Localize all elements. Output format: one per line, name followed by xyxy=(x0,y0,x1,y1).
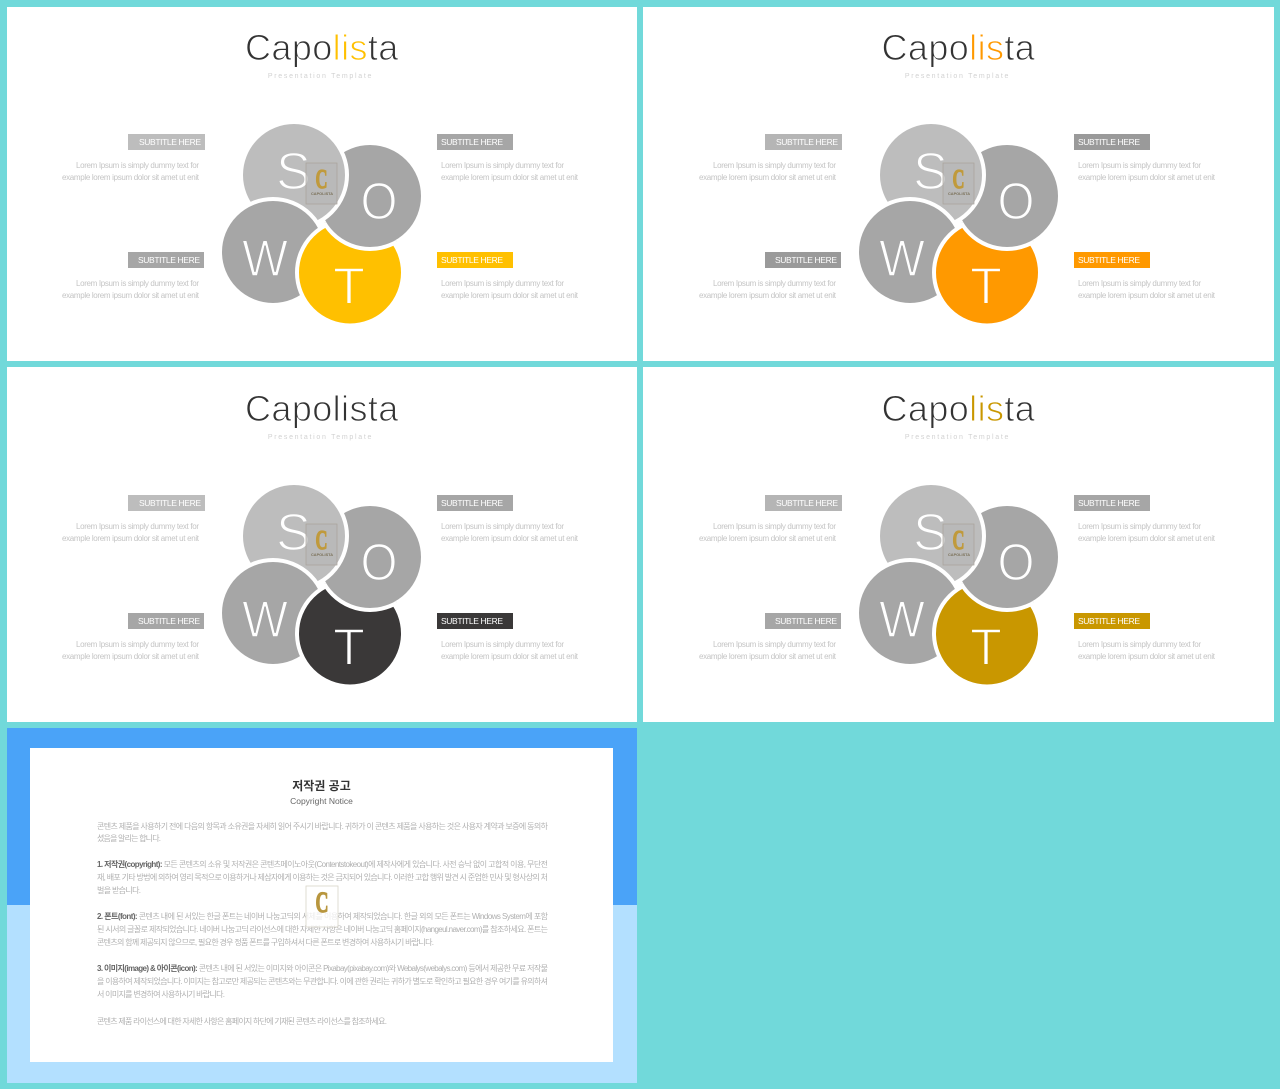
panel: SWOT slide gold xyxy=(643,367,1274,722)
circle S xyxy=(878,122,984,228)
text block: W: example lorem ipsum dolor sit amet ut enit xyxy=(62,291,200,300)
text block: T: Lorem Ipsum is simply dummy text for xyxy=(441,640,564,649)
text block: O xyxy=(437,134,579,182)
heading: copyright: 저작권 공고 xyxy=(292,778,351,793)
text block: O: SUBTITLE HERE xyxy=(1078,137,1140,147)
text block: S xyxy=(699,134,842,182)
text block: T: example lorem ipsum dolor sit amet ut enit xyxy=(441,291,579,300)
circle T xyxy=(297,580,403,686)
panel: copyright notice xyxy=(7,728,637,1083)
panel: SWOT slide dark xyxy=(7,367,637,722)
text block: O: SUBTITLE HERE xyxy=(441,137,503,147)
text block: S: SUBTITLE HERE xyxy=(139,498,201,508)
text block: S: Lorem Ipsum is simply dummy text for xyxy=(713,161,836,170)
text block: S: SUBTITLE HERE xyxy=(776,498,838,508)
logo: CAPOLISTA xyxy=(948,191,970,196)
logo xyxy=(306,524,337,565)
circle S xyxy=(878,483,984,589)
text block: T: example lorem ipsum dolor sit amet ut enit xyxy=(1078,652,1216,661)
text block: T: example lorem ipsum dolor sit amet ut enit xyxy=(1078,291,1216,300)
text block: W: Lorem Ipsum is simply dummy text for xyxy=(76,640,199,649)
text block: W: example lorem ipsum dolor sit amet ut enit xyxy=(699,652,837,661)
circle S: S xyxy=(276,143,311,201)
circle W: W xyxy=(242,591,288,649)
text block: T: Lorem Ipsum is simply dummy text for xyxy=(441,279,564,288)
circle T xyxy=(297,220,403,326)
circle O: O xyxy=(998,534,1034,592)
logo: CAPOLISTA xyxy=(311,552,333,557)
text block: O: example lorem ipsum dolor sit amet ut enit xyxy=(441,534,579,543)
circle O xyxy=(954,143,1060,249)
logo: C xyxy=(316,525,328,555)
text block: W: Lorem Ipsum is simply dummy text for xyxy=(713,279,836,288)
paragraph 2: font xyxy=(97,911,549,947)
text block: T xyxy=(437,252,579,300)
paragraph 3: image and icon xyxy=(97,963,548,999)
circle S: S xyxy=(913,504,948,562)
text block: S xyxy=(62,495,205,543)
logo: C xyxy=(316,164,328,194)
text block: W xyxy=(699,613,841,661)
paragraph 1: copyright: 재, 배포 기타 방법에 의하여 영리 목적으로 이용하거나 제삼자에게 이용하는 것은 금지되어 있습니다. 이러한 고합 행위 발견 시 준엄한 민사 및 형사상의 처 xyxy=(97,872,548,882)
title: Capolista xyxy=(245,388,399,429)
panel: SWOT slide orange xyxy=(643,7,1274,361)
paragraph 1: copyright: 1. 저작권(copyright): 모든 콘텐츠의 소유 및 저작권은 콘텐츠메이노아웃(Contentstokeout)에 제작사에게 있습니다. 사전 승낙 없이 고합적 이용, 무단전 xyxy=(97,859,548,869)
subtitle: Presentation Template xyxy=(905,73,1010,80)
text block: T: Lorem Ipsum is simply dummy text for xyxy=(1078,640,1201,649)
text block: O xyxy=(1074,495,1216,543)
text block: W: SUBTITLE HERE xyxy=(775,616,837,626)
circle T: T xyxy=(970,258,1002,316)
text block: O xyxy=(437,495,579,543)
logo: C xyxy=(316,886,328,919)
circle S xyxy=(241,483,347,589)
circle O xyxy=(317,504,423,610)
circle O: O xyxy=(360,534,398,592)
SWOT diagram xyxy=(857,122,1060,326)
text block: S: example lorem ipsum dolor sit amet ut enit xyxy=(62,534,200,543)
circle W xyxy=(857,560,963,666)
circle O: O xyxy=(998,173,1034,231)
circle T xyxy=(934,220,1040,326)
circle T: T xyxy=(333,619,365,677)
text block: O: example lorem ipsum dolor sit amet ut enit xyxy=(441,173,579,182)
text block: W xyxy=(699,252,841,300)
circle T: T xyxy=(333,258,365,316)
text block: W: example lorem ipsum dolor sit amet ut enit xyxy=(699,291,837,300)
text block: S: Lorem Ipsum is simply dummy text for xyxy=(713,522,836,531)
text block: T: Lorem Ipsum is simply dummy text for xyxy=(1078,279,1201,288)
circle S: S xyxy=(276,504,311,562)
text block: T: SUBTITLE HERE xyxy=(441,616,503,626)
text block: O: example lorem ipsum dolor sit amet ut enit xyxy=(1078,173,1216,182)
text block: S xyxy=(699,495,842,543)
text block: W xyxy=(62,252,204,300)
text block: S: Lorem Ipsum is simply dummy text for xyxy=(76,161,199,170)
SWOT diagram xyxy=(220,122,423,326)
text block: O: Lorem Ipsum is simply dummy text for xyxy=(1078,161,1201,170)
text block: W: example lorem ipsum dolor sit amet ut enit xyxy=(62,652,200,661)
text block: S: Lorem Ipsum is simply dummy text for xyxy=(76,522,199,531)
circle O xyxy=(954,504,1060,610)
text block: W: SUBTITLE HERE xyxy=(138,255,200,265)
panel: SWOT slide yellow xyxy=(7,7,637,361)
text block: T: SUBTITLE HERE xyxy=(1078,255,1140,265)
logo: C xyxy=(952,164,964,194)
text block: S: example lorem ipsum dolor sit amet ut enit xyxy=(699,534,837,543)
SWOT diagram xyxy=(220,483,423,686)
subtitle: Presentation Template xyxy=(268,434,373,441)
paragraph 1: copyright: 벌을 받습니다. xyxy=(97,885,141,895)
intro paragraph xyxy=(97,821,549,843)
text block: T xyxy=(1074,252,1216,300)
logo xyxy=(943,163,974,204)
SWOT diagram xyxy=(857,483,1060,686)
paragraph 3: image and icon: 을 이용하여 제작되었습니다. 이미지는 참고로만 제공되는 콘텐츠와는 무관합니다. 이에 관한 권리는 귀하가 별도로 확인하고 필요한 경우 여기를 유의하셔 xyxy=(97,976,548,986)
text block: O: SUBTITLE HERE xyxy=(1078,498,1140,508)
intro paragraph: 셨음을 알리는 합니다. xyxy=(97,833,161,843)
text block: T xyxy=(437,613,579,661)
circle T: T xyxy=(970,619,1002,677)
title: Capolista xyxy=(882,388,1036,429)
text block: O xyxy=(1074,134,1216,182)
text block: S: SUBTITLE HERE xyxy=(139,137,201,147)
intro paragraph: 콘텐츠 제품을 사용하기 전에 다음의 항목과 소유권을 자세히 읽어 주시기 바랍니다. 귀하가 이 콘텐츠 제품을 사용하는 것은 사용자 계약과 보증에 동의하 xyxy=(97,821,549,831)
subheading: Copyright Notice xyxy=(290,796,353,806)
title: Capolista xyxy=(245,27,399,68)
circle W xyxy=(220,199,326,305)
text block: O: example lorem ipsum dolor sit amet ut enit xyxy=(1078,534,1216,543)
paragraph 1: copyright xyxy=(97,859,548,895)
text block: S: example lorem ipsum dolor sit amet ut enit xyxy=(62,173,200,182)
circle W: W xyxy=(879,230,925,288)
circle O: O xyxy=(360,173,398,231)
text block: S xyxy=(62,134,205,182)
logo xyxy=(943,524,974,565)
paragraph 2: font: 2. 폰트(font): 콘텐츠 내에 된 서있는 한글 폰트는 네이버 나눔고딕의 서체를 이용하여 제작되었습니다. 한글 외의 모든 폰트는 Windows System에 포함 xyxy=(97,911,549,921)
circle T xyxy=(934,580,1040,686)
circle W: W xyxy=(879,591,925,649)
title: Capolista xyxy=(882,27,1036,68)
paragraph 3: image and icon: 3. 이미지(image) & 아이콘(icon): 콘텐츠 내에 된 서있는 이미지와 아이콘은 Pixabay(pixabay.com)와 Webalys(webalys.com) 등에서 제공한 무료 저작물 xyxy=(97,963,548,973)
circle O xyxy=(317,143,423,249)
text block: O: Lorem Ipsum is simply dummy text for xyxy=(441,522,564,531)
text block: S: example lorem ipsum dolor sit amet ut enit xyxy=(699,173,837,182)
circle W xyxy=(220,560,326,666)
text block: W: Lorem Ipsum is simply dummy text for xyxy=(713,640,836,649)
text block: W: SUBTITLE HERE xyxy=(775,255,837,265)
subtitle: Presentation Template xyxy=(905,434,1010,441)
closing paragraph: 콘텐츠 제품 라이선스에 대한 자세한 사항은 홈페이지 하단에 기재된 콘텐츠 라이선스를 참조하세요. xyxy=(97,1016,387,1026)
text block: S: SUBTITLE HERE xyxy=(776,137,838,147)
text block: T: SUBTITLE HERE xyxy=(441,255,503,265)
logo xyxy=(306,886,338,927)
text block: W xyxy=(62,613,204,661)
logo xyxy=(306,163,337,204)
text block: O: Lorem Ipsum is simply dummy text for xyxy=(441,161,564,170)
text block: O: SUBTITLE HERE xyxy=(441,498,503,508)
paragraph 2: font: 된 시서의 글꼴로 제작되었습니다. 네이버 나눔고딕 라이선스에 대한 자세한 사항은 네이버 나눔고딕 홈페이지(hangeul.naver.com)를 참조하세요. 폰트는 xyxy=(97,924,548,934)
logo: CAPOLISTA xyxy=(948,552,970,557)
logo: C xyxy=(952,525,964,555)
text block: T: SUBTITLE HERE xyxy=(1078,616,1140,626)
paragraph 2: font: 콘텐츠의 함께 제공되지 않으므로, 필요한 경우 정품 폰트를 구입하셔서 다른 폰트로 변경하여 사용하시기 바랍니다. xyxy=(97,937,434,947)
logo: CAPOLISTA xyxy=(311,191,333,196)
text block: W: SUBTITLE HERE xyxy=(138,616,200,626)
text block: O: Lorem Ipsum is simply dummy text for xyxy=(1078,522,1201,531)
circle W: W xyxy=(242,230,288,288)
subtitle: Presentation Template xyxy=(268,73,373,80)
text block: T: example lorem ipsum dolor sit amet ut enit xyxy=(441,652,579,661)
circle S: S xyxy=(913,143,948,201)
text block: W: Lorem Ipsum is simply dummy text for xyxy=(76,279,199,288)
text block: T xyxy=(1074,613,1216,661)
circle W xyxy=(857,199,963,305)
circle S xyxy=(241,122,347,228)
paragraph 3: image and icon: 서 이미지를 변경하여 사용하시기 바랍니다. xyxy=(97,989,225,999)
